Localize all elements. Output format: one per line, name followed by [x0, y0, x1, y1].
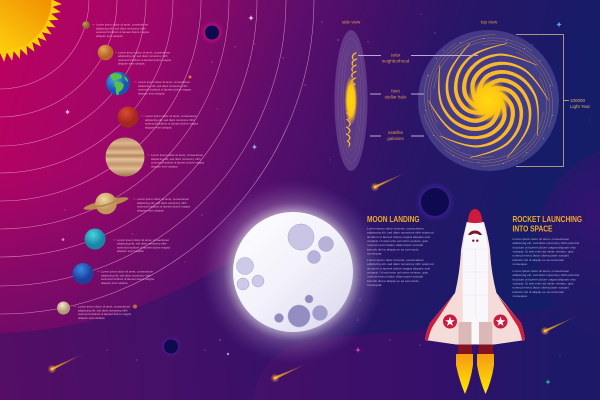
rocket badge right	[494, 314, 508, 328]
label: top view: top view	[481, 20, 498, 24]
rocket badge left	[443, 314, 457, 328]
comet: upper centre	[369, 168, 410, 193]
planet: Mercury	[82, 21, 90, 29]
sparkle: pink top	[248, 15, 254, 21]
label: solar neighborhood: solar	[391, 52, 401, 58]
text: Mercury	[92, 22, 149, 38]
text: Jupiter	[147, 153, 204, 168]
text: moon landing	[367, 226, 434, 287]
moon	[201, 180, 385, 364]
label: faint stellar halo	[385, 88, 407, 100]
heading: rocket launching into space	[512, 214, 582, 234]
sparkle: teal lower right	[545, 379, 551, 385]
star dot: orange upper	[188, 76, 192, 78]
rocket fuselage	[463, 222, 488, 344]
text: Venus	[115, 50, 171, 66]
callout lines: galaxy regions	[358, 56, 478, 136]
sparkle: blue centre	[252, 144, 258, 150]
label: 100000 light year: Light Year	[570, 104, 591, 109]
text: Uranus	[113, 238, 170, 253]
label: faint stellar halo: stellar halo	[385, 94, 407, 100]
rocket engine nozzles	[458, 344, 493, 354]
rocket engines	[458, 322, 492, 344]
black hole: centre right	[415, 182, 455, 222]
rocket red wing edges	[425, 295, 525, 340]
galaxy: top view	[405, 18, 572, 183]
rocket cockpit window	[468, 230, 482, 235]
comet: lower centre	[269, 359, 310, 384]
sparkle: blue top right	[556, 22, 562, 28]
label: solar neighborhood: neighborhood	[382, 58, 410, 64]
heading: rocket launching into space: ROCKET LAUNCHING	[512, 214, 582, 224]
rocket nose cone	[468, 209, 483, 223]
black hole: lower left	[160, 336, 182, 358]
planet: Neptune	[72, 263, 94, 284]
sparkle: pink left	[64, 109, 70, 115]
star dot: orange lower	[133, 304, 137, 308]
rocket	[425, 209, 525, 394]
star dot: pink left	[62, 238, 64, 241]
rocket body and wings	[425, 222, 525, 344]
label: 100000 light year	[570, 98, 591, 109]
text: Earth	[134, 80, 191, 95]
text: Saturn	[133, 197, 190, 212]
label: faint stellar halo: faint	[391, 88, 400, 94]
label: 100000 light year: 100000	[570, 98, 586, 103]
sparkle: magenta lower	[355, 347, 361, 353]
text: rocket launching	[512, 237, 579, 298]
rocket window dots	[472, 240, 478, 242]
planet: Saturn	[83, 193, 129, 214]
moon craters	[236, 224, 334, 327]
heading: moon landing: MOON LANDING	[367, 214, 420, 224]
label: satellite galaxies	[387, 130, 405, 141]
star dot: lilac lower	[227, 353, 229, 355]
rocket flames	[456, 354, 494, 394]
label: satellite galaxies: galaxies	[387, 136, 405, 141]
planetary orbit rings	[0, 0, 314, 314]
comet: lower left	[46, 349, 86, 375]
planet: Venus	[98, 45, 113, 60]
label: side view: side view	[342, 20, 361, 24]
planet: Uranus	[84, 228, 106, 250]
label: satellite galaxies: satellite	[388, 130, 404, 135]
text: Pluto	[74, 304, 131, 320]
heading: rocket launching into space: INTO SPACE	[512, 224, 553, 234]
rocket panel lines	[431, 249, 520, 344]
planet: Pluto	[57, 302, 70, 314]
bracket: galaxy diameter	[516, 34, 569, 166]
lower nebula hill	[252, 300, 600, 400]
planet: Mars	[118, 106, 138, 128]
right nebula blob	[537, 147, 600, 343]
planet: Jupiter	[106, 138, 144, 176]
sun	[0, 0, 62, 62]
black hole: top	[200, 20, 224, 44]
galaxy: side view	[334, 30, 368, 171]
lower background shading	[0, 170, 300, 335]
comet: lower right	[539, 312, 580, 337]
label: solar neighborhood	[382, 52, 410, 64]
darker lower nebula wave	[0, 250, 420, 400]
text: Mars	[141, 114, 198, 129]
planet: Earth	[106, 72, 130, 97]
text: Neptune	[97, 270, 154, 285]
